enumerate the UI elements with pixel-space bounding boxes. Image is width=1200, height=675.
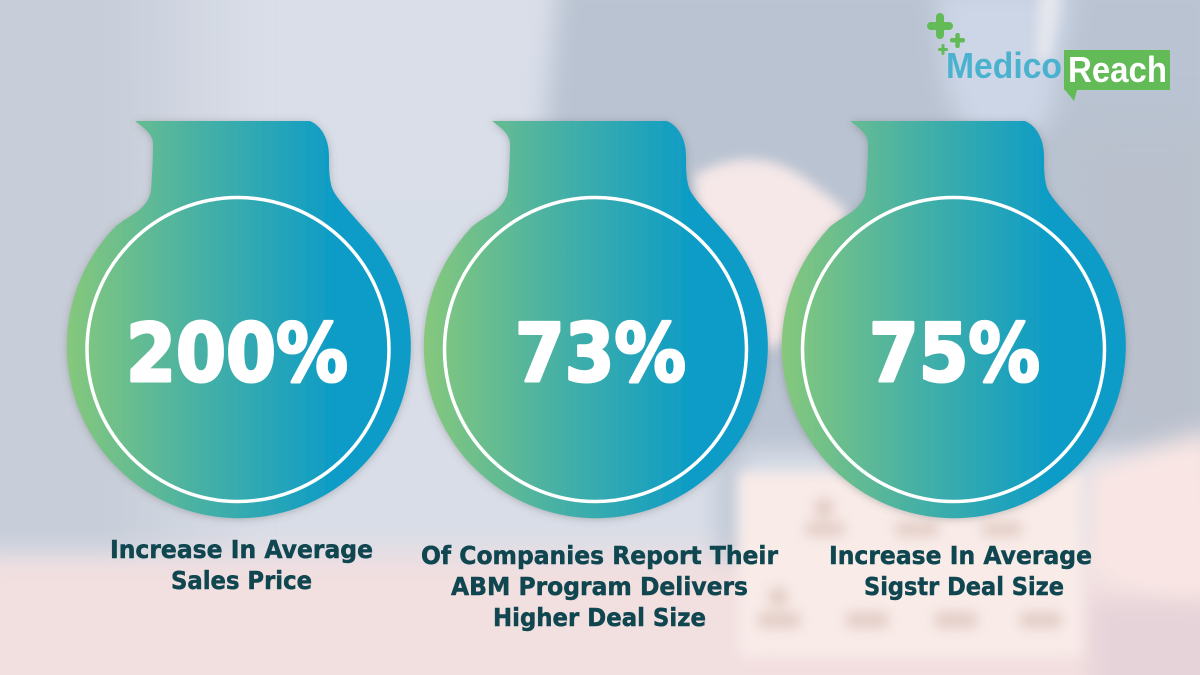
description: Of Companies Report Their: [421, 541, 779, 570]
number: 200%: [126, 307, 348, 400]
logo: MedicoReach: [927, 13, 1170, 101]
right hand: [1085, 430, 1200, 620]
description: [110, 535, 373, 595]
panel: 75% stat: [782, 121, 1126, 601]
icon: plus signs: [927, 13, 965, 55]
description: Sales Price: [171, 566, 312, 595]
number: 75%: [869, 307, 1040, 400]
description: [421, 541, 779, 632]
logo speech box: [1064, 50, 1170, 101]
panel: 200% stat: [67, 121, 411, 595]
badge shape: [67, 121, 411, 518]
hand: [695, 159, 852, 350]
badge shape: [424, 121, 768, 518]
white ring: [444, 198, 746, 502]
white ring: [87, 198, 389, 502]
description: Higher Deal Size: [493, 603, 706, 632]
white ring: [802, 198, 1104, 502]
description: Increase In Average: [110, 535, 373, 564]
description: ABM Program Delivers: [451, 572, 748, 601]
shirt highlights: [935, 0, 1075, 170]
suit: [545, 0, 1200, 560]
logo word: Medico: Medico: [946, 45, 1062, 86]
description: Increase In Average: [829, 541, 1092, 570]
panel: 73% stat: [421, 121, 779, 632]
number: 73%: [515, 307, 686, 400]
logo word: Reach: Reach: [1068, 49, 1167, 90]
blocks: [738, 472, 1083, 657]
table: [0, 570, 740, 675]
badge shape: [782, 121, 1126, 518]
description: Sigstr Deal Size: [864, 572, 1064, 601]
suit lapel shadow: [1060, 130, 1200, 470]
description: [829, 541, 1092, 601]
